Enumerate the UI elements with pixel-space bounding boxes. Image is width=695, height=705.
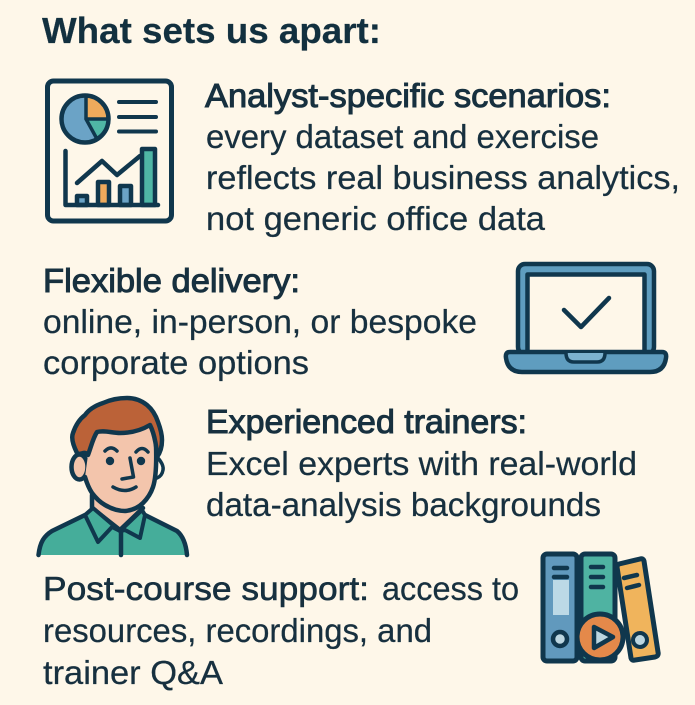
text block: experienced trainers: Excel experts with real-world [206,445,637,482]
text block: flexible delivery: corporate options [43,344,309,381]
icon: trainer portrait [38,398,187,555]
text block: analyst-specific scenarios: Analyst-specific scenarios: [205,77,611,114]
text block: analyst-specific scenarios: reflects real business analytics, [206,159,680,196]
text block: post-course support: access to [382,570,519,607]
text block: post-course support: trainer Q&A [43,654,223,691]
text block: analyst-specific scenarios [205,77,680,237]
icon: analytics report [48,81,172,221]
icon: laptop with check mark [506,264,666,372]
text block: experienced trainers [206,403,637,523]
text block: post-course support [43,570,519,691]
text block: post-course support: Post-course support: [43,570,369,607]
text block: flexible delivery: online, in-person, or bespoke [43,303,477,340]
text block: analyst-specific scenarios: every dataset and exercise [206,118,599,155]
text block: analyst-specific scenarios: not generic office data [206,200,546,237]
text block: flexible delivery [43,262,477,381]
text block: flexible delivery: Flexible delivery: [43,262,300,299]
text block: experienced trainers: data-analysis backgrounds [206,486,601,523]
title: What sets us apart: [42,10,381,51]
text block: post-course support: resources, recordings, and [43,612,432,649]
icon: binders with play button [543,554,658,661]
text block: experienced trainers: Experienced trainers: [206,403,527,440]
